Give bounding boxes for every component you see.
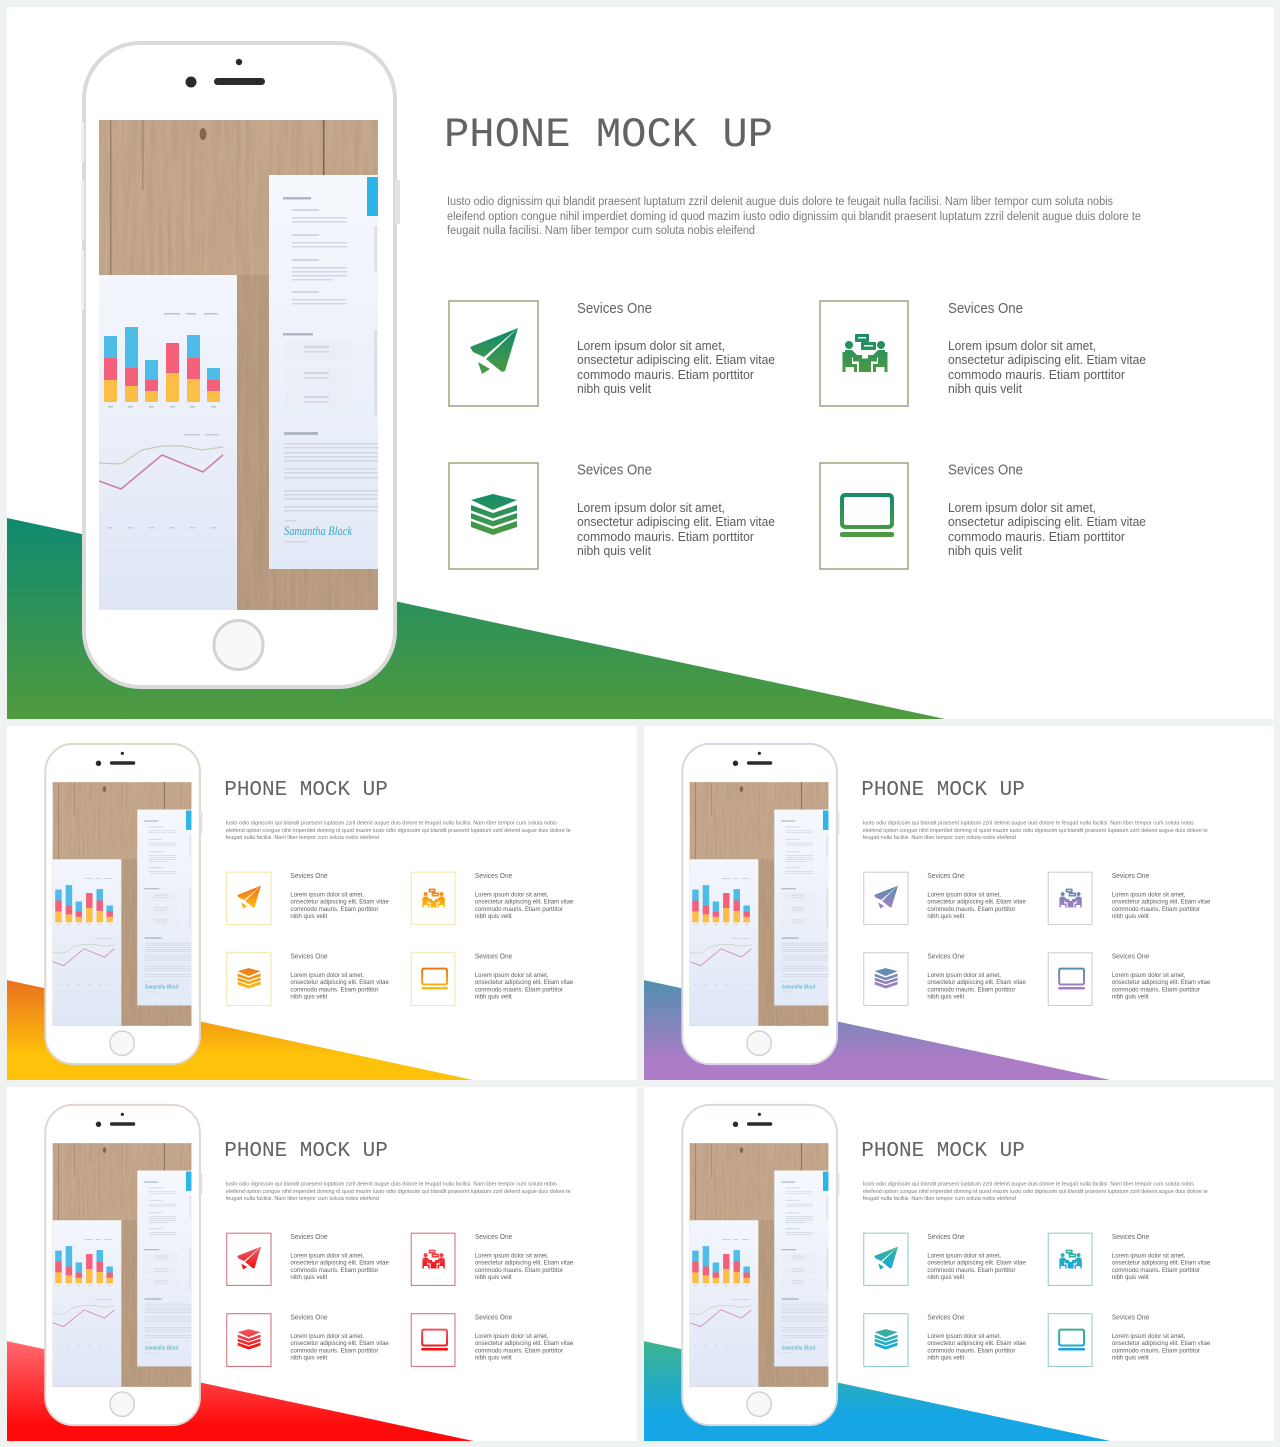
service text: Sevices One [1112,871,1149,880]
service text: onsectetur adipiscing elit. Etiam vitae [1112,1340,1211,1347]
service text: commodo mauris. Etiam porttitor [1112,1348,1200,1355]
service description [948,501,1146,558]
service text: Lorem ipsum dolor sit amet, [927,1253,1001,1260]
service card: laptop [411,951,574,1005]
icon: meeting [422,889,445,907]
service text: nibh quis velit [475,913,512,920]
intro paragraph [226,820,571,841]
intro paragraph: feugait nulla facilisi. Nam liber tempor cum soluta nobis eleifend [226,1196,379,1202]
intro paragraph: eleifend option congue nihil imperdiet doming id quod mazim iusto odio dignissim qui blandit praesent luptatum zzril delenit augue duis dolore te [863,828,1208,834]
service text: onsectetur adipiscing elit. Etiam vitae [290,979,389,986]
service text: Lorem ipsum dolor sit amet, [475,1253,549,1260]
service text: commodo mauris. Etiam porttitor [475,987,563,994]
intro paragraph [226,1181,571,1202]
service text: nibh quis velit [927,1274,964,1281]
service text: onsectetur adipiscing elit. Etiam vitae [290,1260,389,1267]
service card: layers [227,951,389,1005]
service description [948,339,1146,396]
intro paragraph: feugait nulla facilisi. Nam liber tempor cum soluta nobis eleifend [863,1196,1016,1202]
service text [290,951,389,1000]
intro paragraph: Iusto odio dignissim qui blandit praesent luptatum zzril delenit augue duis dolore te feugait nulla facilisi. Nam liber tempor cum soluta nobis [863,820,1194,826]
icon: layers [875,968,898,989]
intro paragraph: eleifend option congue nihil imperdiet doming id quod mazim iusto odio dignissim qui blandit praesent luptatum zzril delenit augue duis dolore te [447,211,1141,223]
signature on photo: Samantha Black [782,1345,816,1352]
service description: commodo mauris. Etiam porttitor [577,530,754,544]
service text: commodo mauris. Etiam porttitor [475,906,563,913]
service description [577,501,775,558]
service text: onsectetur adipiscing elit. Etiam vitae [475,899,574,906]
service description: Lorem ipsum dolor sit amet, [948,501,1096,515]
phone mockup [45,744,202,1064]
service text: commodo mauris. Etiam porttitor [927,1267,1015,1274]
service text: Sevices One [475,1232,512,1241]
service card: layers [864,951,1026,1005]
phone screen photo [690,1143,828,1387]
icon: paper plane [470,328,518,374]
service text: commodo mauris. Etiam porttitor [927,1348,1015,1355]
green diagonal band [7,518,945,719]
phone screen photo [53,1143,191,1387]
service text: Lorem ipsum dolor sit amet, [1112,892,1186,899]
panel: red slide [7,1087,637,1441]
service description: onsectetur adipiscing elit. Etiam vitae [577,353,775,367]
service card: paper plane [227,871,389,924]
service text: nibh quis velit [1112,1274,1149,1281]
intro paragraph: feugait nulla facilisi. Nam liber tempor cum soluta nobis eleifend [447,225,755,237]
service text: Lorem ipsum dolor sit amet, [1112,1253,1186,1260]
service description: commodo mauris. Etiam porttitor [948,368,1125,382]
icon: meeting [1059,1250,1082,1268]
service text: nibh quis velit [290,913,327,920]
service description: nibh quis velit [948,544,1023,558]
icon: layers [471,494,517,535]
panel: orange slide [7,726,637,1080]
service text: nibh quis velit [1112,1354,1149,1361]
signature on photo: Samantha Black [145,984,179,991]
service text: onsectetur adipiscing elit. Etiam vitae [927,1260,1026,1267]
panel: purple slide [644,726,1274,1080]
service text: nibh quis velit [475,1274,512,1281]
service card: meeting [411,871,574,924]
service description: nibh quis velit [577,544,652,558]
icon: layers [875,1329,898,1350]
service description: onsectetur adipiscing elit. Etiam vitae [577,515,775,529]
title: PHONE MOCK UP [224,1140,388,1163]
signature on photo: Samantha Black [782,984,816,991]
service text [927,871,1026,920]
panel: teal slide [644,1087,1274,1441]
service text: Lorem ipsum dolor sit amet, [290,892,364,899]
service text: onsectetur adipiscing elit. Etiam vitae [927,899,1026,906]
service text [927,1312,1026,1361]
service text: Lorem ipsum dolor sit amet, [290,1333,364,1340]
service description [577,339,775,396]
phone mockup [81,43,400,687]
service text: commodo mauris. Etiam porttitor [290,987,378,994]
service text: Lorem ipsum dolor sit amet, [475,1333,549,1340]
icon: paper plane [237,886,261,908]
service text: Sevices One [290,1312,328,1321]
service text [475,871,574,920]
icon: layers [238,968,261,989]
service text [1112,871,1211,920]
service card: laptop [1048,1312,1211,1366]
service text: onsectetur adipiscing elit. Etiam vitae [475,1340,574,1347]
service text: commodo mauris. Etiam porttitor [475,1267,563,1274]
service text: onsectetur adipiscing elit. Etiam vitae [1112,899,1211,906]
service text: Lorem ipsum dolor sit amet, [927,972,1001,979]
service text: Sevices One [927,951,965,960]
service text [927,1232,1026,1281]
service text: Sevices One [290,951,328,960]
service description: onsectetur adipiscing elit. Etiam vitae [948,515,1146,529]
service text: nibh quis velit [1112,913,1149,920]
icon: laptop [840,493,894,537]
service text: Sevices One [290,871,328,880]
service text: nibh quis velit [927,913,964,920]
signature on photo: Samantha Black [145,1345,179,1352]
service text: Sevices One [927,1312,965,1321]
service text: commodo mauris. Etiam porttitor [290,1267,378,1274]
service card: paper plane [864,871,1026,924]
icon: laptop [1058,1329,1085,1351]
service text: Sevices One [1112,1312,1149,1321]
service text: Lorem ipsum dolor sit amet, [475,972,549,979]
service text: Lorem ipsum dolor sit amet, [927,892,1001,899]
icon: laptop [421,968,448,990]
service text: nibh quis velit [290,1274,327,1281]
service text: Sevices One [290,1232,328,1241]
icon: paper plane [874,886,898,908]
service card: meeting [1048,1232,1211,1285]
service text [1112,951,1211,1000]
service text: nibh quis velit [1112,993,1149,1000]
service text: onsectetur adipiscing elit. Etiam vitae [1112,979,1211,986]
intro paragraph: Iusto odio dignissim qui blandit praesent luptatum zzril delenit augue duis dolore te feugait nulla facilisi. Nam liber tempor cum soluta nobis [226,1181,557,1187]
service text: onsectetur adipiscing elit. Etiam vitae [290,899,389,906]
phone screen photo [690,782,828,1026]
service text: onsectetur adipiscing elit. Etiam vitae [475,1260,574,1267]
service text: commodo mauris. Etiam porttitor [475,1348,563,1355]
service text: Sevices One [1112,1232,1149,1241]
service description: Lorem ipsum dolor sit amet, [577,501,725,515]
intro paragraph [863,1181,1208,1202]
service text: onsectetur adipiscing elit. Etiam vitae [475,979,574,986]
service description: nibh quis velit [948,382,1023,396]
service card: laptop [820,462,1146,569]
service card: layers [227,1312,389,1366]
intro paragraph: Iusto odio dignissim qui blandit praesent luptatum zzril delenit augue duis dolore te feugait nulla facilisi. Nam liber tempor cum soluta nobis [226,820,557,826]
panel: green slide [7,7,1274,719]
service text [290,1232,389,1281]
title: PHONE MOCK UP [224,779,388,802]
service text: commodo mauris. Etiam porttitor [1112,906,1200,913]
service text: onsectetur adipiscing elit. Etiam vitae [927,1340,1026,1347]
service description: commodo mauris. Etiam porttitor [948,530,1125,544]
icon: laptop [421,1329,448,1351]
service text: Sevices One [475,871,512,880]
intro paragraph [863,820,1208,841]
service card: laptop [1048,951,1211,1005]
title: PHONE MOCK UP [861,779,1025,802]
service card: meeting [411,1232,574,1285]
service text [927,951,1026,1000]
icon: laptop [1058,968,1085,990]
icon: paper plane [874,1247,898,1269]
line chart [99,434,223,528]
service card: meeting [820,301,1146,406]
title: PHONE MOCK UP [861,1140,1025,1163]
stacked bar chart [104,313,220,408]
phone mockup [682,1105,839,1425]
phone screen photo [53,782,191,1026]
service heading: Sevices One [577,462,652,478]
service card: laptop [411,1312,574,1366]
intro paragraph [447,196,1141,237]
phone screen photo [99,120,378,610]
service text: commodo mauris. Etiam porttitor [290,1348,378,1355]
service text: Lorem ipsum dolor sit amet, [290,972,364,979]
service text: nibh quis velit [475,993,512,1000]
intro paragraph: Iusto odio dignissim qui blandit praesent luptatum zzril delenit augue duis dolore te feugait nulla facilisi. Nam liber tempor cum soluta nobis [863,1181,1194,1187]
service text [1112,1312,1211,1361]
service text: commodo mauris. Etiam porttitor [927,906,1015,913]
service description: onsectetur adipiscing elit. Etiam vitae [948,353,1146,367]
service text: onsectetur adipiscing elit. Etiam vitae [927,979,1026,986]
service card: paper plane [449,301,775,406]
service text: Sevices One [927,1232,965,1241]
teal diagonal band [644,1341,1110,1441]
service card: layers [864,1312,1026,1366]
service text: Lorem ipsum dolor sit amet, [475,892,549,899]
service text [290,1312,389,1361]
service text: nibh quis velit [475,1354,512,1361]
signature on photo: Samantha Black [284,523,352,538]
service description: Lorem ipsum dolor sit amet, [577,339,725,353]
service text: commodo mauris. Etiam porttitor [927,987,1015,994]
service text: onsectetur adipiscing elit. Etiam vitae [1112,1260,1211,1267]
service text: Sevices One [475,951,512,960]
service description: Lorem ipsum dolor sit amet, [948,339,1096,353]
red diagonal band [7,1341,473,1441]
service text: Lorem ipsum dolor sit amet, [927,1333,1001,1340]
service card: paper plane [227,1232,389,1285]
service card: paper plane [864,1232,1026,1285]
service text [475,1232,574,1281]
intro paragraph: eleifend option congue nihil imperdiet doming id quod mazim iusto odio dignissim qui blandit praesent luptatum zzril delenit augue duis dolore te [226,1189,571,1195]
service heading: Sevices One [577,301,652,317]
service description: commodo mauris. Etiam porttitor [577,368,754,382]
intro paragraph: Iusto odio dignissim qui blandit praesent luptatum zzril delenit augue duis dolore te feugait nulla facilisi. Nam liber tempor cum soluta nobis [447,196,1113,208]
icon: meeting [1059,889,1082,907]
icon: meeting [422,1250,445,1268]
service text [1112,1232,1211,1281]
service text [290,871,389,920]
service text: nibh quis velit [927,1354,964,1361]
intro paragraph: eleifend option congue nihil imperdiet doming id quod mazim iusto odio dignissim qui blandit praesent luptatum zzril delenit augue duis dolore te [863,1189,1208,1195]
service text: Sevices One [475,1312,512,1321]
service text: Sevices One [927,871,965,880]
service heading: Sevices One [948,301,1023,317]
service text: nibh quis velit [290,1354,327,1361]
service text: commodo mauris. Etiam porttitor [1112,987,1200,994]
service text: nibh quis velit [290,993,327,1000]
service heading: Sevices One [948,462,1023,478]
service description: nibh quis velit [577,382,652,396]
icon: paper plane [237,1247,261,1269]
service text: Lorem ipsum dolor sit amet, [290,1253,364,1260]
service text: nibh quis velit [927,993,964,1000]
service text: Sevices One [1112,951,1149,960]
phone mockup [682,744,839,1064]
service text [475,951,574,1000]
intro paragraph: feugait nulla facilisi. Nam liber tempor cum soluta nobis eleifend [863,835,1016,841]
title: PHONE MOCK UP [444,111,773,159]
orange diagonal band [7,980,473,1080]
phone mockup [45,1105,202,1425]
intro paragraph: feugait nulla facilisi. Nam liber tempor cum soluta nobis eleifend [226,835,379,841]
icon: meeting [842,334,888,372]
icon: layers [238,1329,261,1350]
service text: commodo mauris. Etiam porttitor [290,906,378,913]
intro paragraph: eleifend option congue nihil imperdiet doming id quod mazim iusto odio dignissim qui blandit praesent luptatum zzril delenit augue duis dolore te [226,828,571,834]
service text: commodo mauris. Etiam porttitor [1112,1267,1200,1274]
service text: Lorem ipsum dolor sit amet, [1112,972,1186,979]
service text: Lorem ipsum dolor sit amet, [1112,1333,1186,1340]
purple diagonal band [644,980,1110,1080]
service card: layers [449,462,775,569]
service text: onsectetur adipiscing elit. Etiam vitae [290,1340,389,1347]
service card: meeting [1048,871,1211,924]
service text [475,1312,574,1361]
